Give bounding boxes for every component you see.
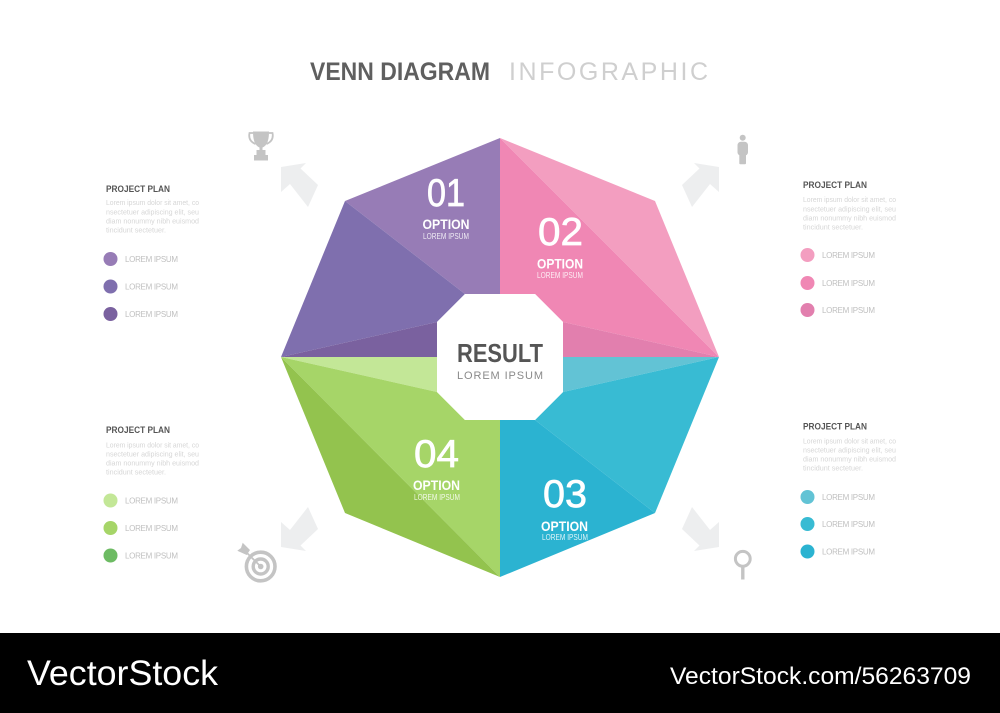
arrow: bottom left: [281, 507, 318, 551]
paragraph: nsectetuer adipiscing elit, seu: [803, 448, 896, 454]
icon: magnifier: [735, 551, 750, 580]
icon: target: [237, 543, 275, 581]
footer watermark bar: VectorStock.com/56263709: [670, 663, 971, 690]
panel: segment 03 teal: OPTION: [541, 518, 588, 534]
paragraph: nsectetuer adipiscing elit, seu: [106, 452, 199, 458]
legend: LOREM IPSUM: [822, 306, 875, 315]
legend: [800, 490, 875, 558]
panel: segment 04 green: [281, 357, 500, 577]
center result octagon: RESULT: [457, 338, 543, 368]
legend: LOREM IPSUM: [125, 524, 178, 533]
paragraph: tincidunt sectetuer.: [803, 224, 863, 232]
arrow: top right: [682, 163, 719, 207]
panel: segment 01 purple: OPTION: [422, 216, 470, 232]
text block: top right: [800, 180, 896, 317]
paragraph: [803, 438, 896, 472]
text block: top right: PROJECT PLAN: [803, 180, 867, 190]
panel: segment 04 green: 04: [414, 433, 459, 476]
panel: segment 01 purple: LOREM IPSUM: [423, 231, 469, 241]
legend: LOREM IPSUM: [125, 496, 178, 506]
center result octagon: LOREM IPSUM: [457, 370, 543, 382]
panel: segment 02 pink: [500, 138, 719, 357]
paragraph: diam nonummy nibh euismod: [803, 456, 896, 464]
paragraph: [803, 197, 896, 232]
text block: bottom right: [800, 422, 896, 558]
paragraph: diam nonummy nibh euismod: [106, 218, 199, 226]
paragraph: diam nonummy nibh euismod: [803, 216, 896, 222]
paragraph: diam nonummy nibh euismod: [106, 460, 199, 468]
panel: segment 02 pink: 02: [538, 211, 583, 254]
legend: LOREM IPSUM: [125, 282, 178, 292]
legend: LOREM IPSUM: [822, 279, 875, 288]
paragraph: tincidunt sectetuer.: [803, 466, 863, 472]
icon: person: [738, 135, 748, 164]
icon: trophy: [249, 132, 273, 160]
paragraph: nsectetuer adipiscing elit, seu: [106, 210, 199, 216]
paragraph: nsectetuer adipiscing elit, seu: [803, 206, 896, 214]
paragraph: [106, 200, 199, 234]
text block: top left: [104, 184, 199, 321]
legend: [104, 494, 178, 562]
panel: segment 01 purple: 01: [427, 172, 465, 215]
legend: [104, 252, 178, 321]
paragraph: Lorem ipsum dolor sit amet, co: [803, 197, 896, 204]
legend: LOREM IPSUM: [125, 552, 178, 560]
panel: segment 04 green: LOREM IPSUM: [414, 492, 460, 502]
text block: top left: PROJECT PLAN: [106, 184, 170, 194]
panel: segment 03 teal: [500, 357, 719, 577]
legend: LOREM IPSUM: [125, 255, 178, 264]
legend: LOREM IPSUM: [822, 520, 875, 529]
center result octagon: [437, 294, 563, 420]
legend: LOREM IPSUM: [822, 548, 875, 556]
title: VENN DIAGRAM: [310, 58, 490, 86]
arrow: top left: [281, 163, 318, 207]
text block: bottom right: PROJECT PLAN: [803, 422, 867, 432]
panel: segment 03 teal: 03: [543, 473, 587, 516]
legend: LOREM IPSUM: [125, 310, 178, 319]
title: [310, 58, 708, 86]
panel: segment 02 pink: OPTION: [537, 256, 583, 272]
panel: segment 04 green: OPTION: [413, 477, 460, 493]
panel: segment 01 purple: [281, 138, 500, 357]
paragraph: tincidunt sectetuer.: [106, 470, 166, 476]
paragraph: [106, 442, 199, 476]
footer watermark bar: VectorStock: [27, 654, 219, 693]
legend: [800, 248, 875, 317]
text block: bottom left: PROJECT PLAN: [106, 425, 170, 435]
title: INFOGRAPHIC: [509, 58, 708, 86]
panel: segment 02 pink: LOREM IPSUM: [537, 270, 583, 280]
paragraph: Lorem ipsum dolor sit amet, co: [803, 438, 896, 446]
text block: bottom left: [104, 425, 199, 562]
panel: segment 03 teal: LOREM IPSUM: [542, 532, 588, 542]
legend: LOREM IPSUM: [822, 251, 875, 260]
paragraph: tincidunt sectetuer.: [106, 228, 166, 234]
arrow: bottom right: [682, 507, 719, 551]
paragraph: Lorem ipsum dolor sit amet, co: [106, 200, 199, 207]
paragraph: Lorem ipsum dolor sit amet, co: [106, 442, 199, 450]
legend: LOREM IPSUM: [822, 493, 875, 502]
footer watermark bar: [0, 633, 1000, 713]
